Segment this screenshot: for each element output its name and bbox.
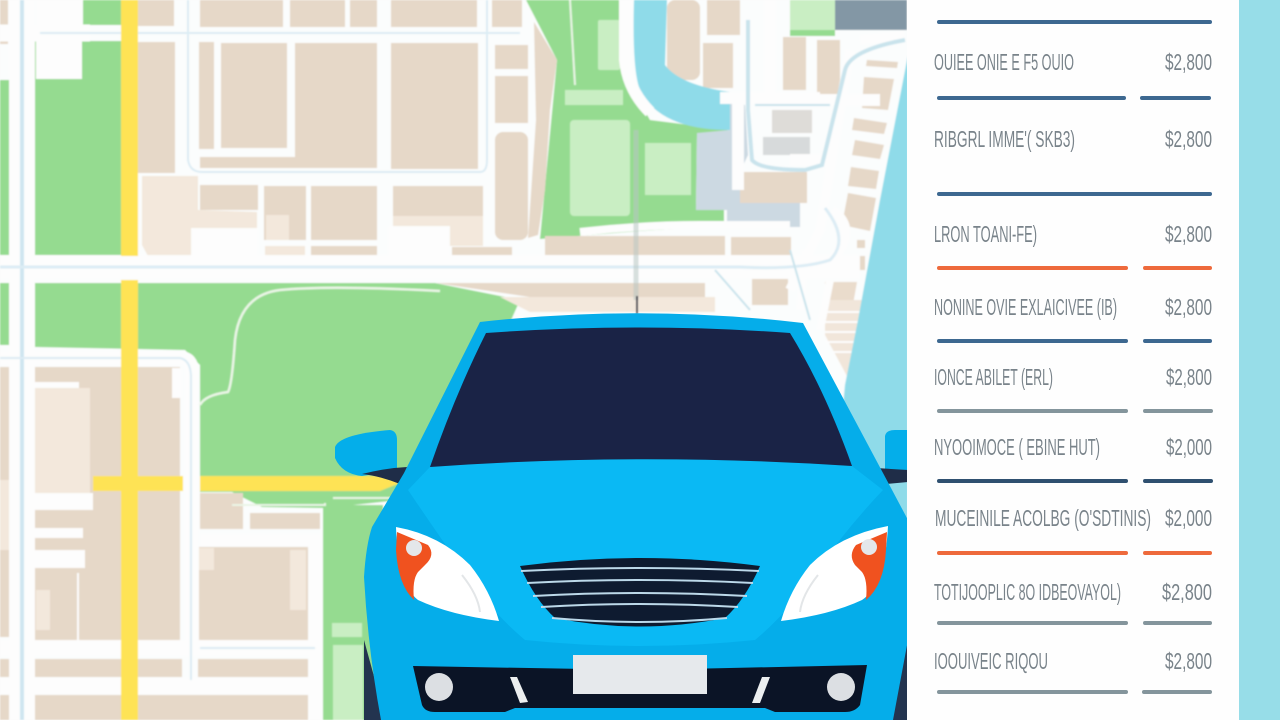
row 7 [935, 505, 1212, 555]
row 7: $2,000 [1165, 505, 1212, 531]
row 8: TOTIJOOPLIC 8O IDBEOVAYOL) [934, 579, 1121, 605]
car: left mirror [335, 430, 407, 484]
car: right mirror [876, 430, 908, 484]
map: grey-blue lot [696, 102, 812, 227]
map: white park path [200, 288, 440, 405]
row 3: $2,800 [1165, 221, 1212, 247]
row 4: NONINE OVIE EXLAICIVEE (IB) [934, 294, 1117, 320]
row 4: $2,800 [1165, 294, 1212, 320]
car illustration [335, 313, 908, 720]
map: water [634, 0, 908, 545]
row 1 [934, 49, 1212, 100]
row 9: IOOUIVEIC RIQOU [934, 648, 1048, 674]
right side strip [1239, 0, 1280, 720]
car: lower bumper intake [413, 665, 867, 712]
panel: price list [907, 0, 1239, 720]
car: right headlight [781, 526, 888, 621]
car: rear wheels [364, 640, 908, 720]
car: bumper reflectors [510, 677, 770, 703]
row 6: NYOOIMOCE ( EBINE HUT) [934, 434, 1100, 460]
map: white overlays [35, 0, 450, 640]
car: left headlight [396, 527, 499, 621]
map background [0, 0, 910, 720]
car: windshield [430, 328, 852, 467]
row 4 [934, 294, 1212, 343]
car: fog lights [425, 673, 855, 701]
map: tan city blocks left [0, 0, 557, 720]
map: tan stripes by shore [825, 312, 860, 352]
map: tan blocks center [436, 0, 898, 378]
row 5 [934, 364, 1213, 413]
car: hood [408, 459, 883, 646]
row 6 [934, 434, 1213, 483]
row 8 [934, 579, 1212, 625]
map: grey pole [634, 130, 638, 300]
car: licence plate [573, 655, 707, 694]
row 5: $2,800 [1166, 364, 1212, 390]
row 1: OUIEE ONIE E F5 OUIO [934, 49, 1074, 75]
row 9: $2,800 [1165, 648, 1212, 674]
map: green areas [0, 0, 835, 720]
row 2: RIBGRL IMME'( SKB3) [934, 126, 1075, 152]
row 6: $2,000 [1166, 434, 1212, 460]
row 8: $2,800 [1162, 579, 1212, 605]
map: dark grey block [835, 0, 907, 30]
row 1: $2,800 [1165, 49, 1212, 75]
row 2 [934, 126, 1212, 196]
car: grille [520, 558, 760, 626]
map: lighter tan blocks [0, 176, 483, 630]
row 2: $2,800 [1165, 126, 1212, 152]
map: yellow highway [93, 0, 400, 720]
map: thin light-blue road lines [0, 0, 905, 720]
map: road network white [0, 0, 905, 720]
map: light green parks [332, 0, 835, 720]
divider row top [937, 20, 1212, 24]
row 3: LRON TOANI-FE) [934, 221, 1037, 247]
row 5: IONCE ABILET (ERL) [934, 364, 1053, 390]
row 9 [934, 648, 1212, 694]
car: body [364, 313, 908, 720]
row 3 [934, 221, 1212, 270]
